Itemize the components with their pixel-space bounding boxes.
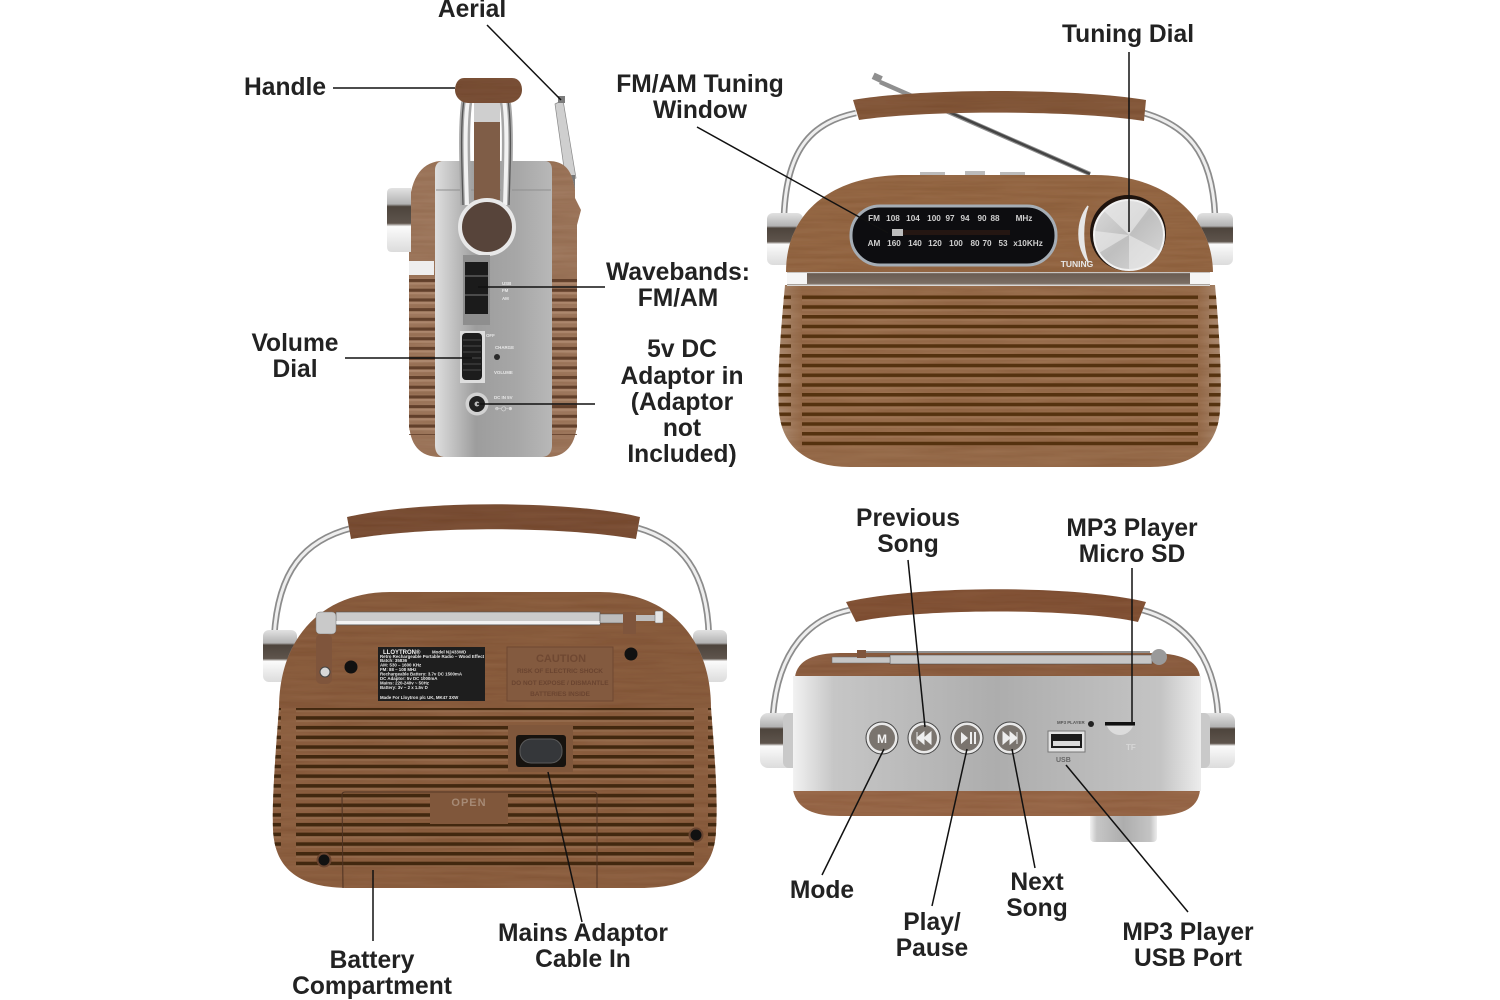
callout: micro sd: MP3 Player [1066,515,1198,542]
back handle [274,504,709,640]
side aerial [555,96,576,195]
callout: dc adaptor: Adaptor in [621,363,743,390]
callout: tuning window: FM/AM Tuning [616,71,784,98]
panel: side view radio [387,78,581,457]
top cabinet [793,653,1201,816]
side body [409,161,581,457]
side volume dial: VOLUME [494,370,513,375]
front cabinet [775,175,1225,467]
callout: usb port: MP3 Player [1122,919,1254,946]
callout: usb port: USB Port [1134,945,1242,972]
callout: mode: Mode [790,877,854,904]
callout: next song: Next [1010,869,1064,896]
callout: dc adaptor: Included) [627,441,737,468]
caution panel: RISK OF ELECTRIC SHOCK [517,668,603,675]
front aerial [872,73,1090,174]
callout: tuning window [616,71,888,233]
callout: battery compartment [292,870,452,1000]
callout: play pause: Pause [896,935,968,962]
callout: micro sd [1066,515,1198,724]
rating label: AM: 530 – 1600 KHz [380,662,422,668]
rating label: Mains: 220-240v ~ 50Hz [380,680,430,686]
rating label [378,647,485,701]
panel: front view radio [767,73,1233,467]
tuning window: 100 [949,239,963,248]
side dc jack: DC IN 5V [494,395,513,400]
rating label: FM: 88 – 108 MHz [380,667,417,672]
back cabinet [270,592,720,890]
top handle [773,589,1218,715]
side volume dial [460,331,514,383]
tuning window: FM [868,214,880,223]
tuning window: 94 [960,214,970,223]
callout: play pause: Play/ [903,909,961,936]
usb port [1048,720,1094,764]
callout: dc adaptor: 5v DC [647,336,717,363]
back side knobs [263,630,727,682]
caution panel [507,647,613,701]
tuning window: 140 [908,239,922,248]
micro sd slot [1105,722,1136,752]
battery compartment [342,792,597,888]
side dc jack: ⊖–◯–⊕ [495,406,512,412]
callout: volume dial: Volume [251,330,339,357]
callout: dc adaptor: (Adaptor [631,389,734,416]
tuning window: 97 [945,214,955,223]
callout: previous song [856,505,960,727]
next button [994,722,1026,754]
mode button [866,722,898,754]
mode button: M [877,732,887,746]
side volume dial: OFF [486,333,495,338]
callout: wavebands [478,259,750,312]
callout: play pause [896,749,968,962]
rating label: LLOYTRON® [383,649,421,656]
tuning window: 160 [887,239,901,248]
tuning window: 120 [928,239,942,248]
side waveband switch: FM [502,288,509,293]
back aerial [316,611,663,684]
callout: handle: Handle [244,74,326,101]
tuning dial: TUNING [1061,259,1094,269]
rating label: DC Adaptor: 5v DC 1000mA [380,676,438,681]
callout: volume dial: Dial [272,356,318,383]
rating label: Made For Lloytron plc UK, MK47 3XW [380,695,459,700]
callout: mode [790,749,884,904]
top bottom knob [1090,812,1157,842]
rating label: Battery: 3v – 2 x 1.5v D [380,685,428,690]
mains adaptor port [516,735,566,767]
caution panel: CAUTION [536,653,586,665]
back screws [318,828,702,866]
callout: mains adaptor: Cable In [535,946,631,973]
side dc jack [466,392,513,416]
top aerial [832,649,1167,665]
rating label: Rechargeable Battery: 3.7v DC 1500mA [380,672,463,676]
tuning window: MHz [1016,214,1032,223]
caution panel: BATTERIES INSIDE [530,691,591,698]
rating label: Model N2433WD [432,650,466,654]
callout: battery compartment: Battery [330,947,415,974]
rating label: Batch: 35836 [380,658,408,663]
top side knobs [760,713,1235,768]
callout: micro sd: Micro SD [1079,541,1185,568]
callout: wavebands: Wavebands: [606,259,750,286]
tuning dial [1061,195,1166,271]
callout: tuning window: Window [653,97,748,124]
callout: dc adaptor [477,336,743,468]
front side knobs [767,213,1233,265]
tuning window: 104 [906,214,920,223]
previous button [908,722,940,754]
callout: next song: Song [1006,895,1068,922]
play pause button [951,722,983,754]
tuning window: 53 [998,239,1008,248]
tuning window [851,206,1056,265]
usb port: MP3 PLAYER [1057,720,1085,725]
callout: wavebands: FM/AM [638,285,718,312]
callout: mains adaptor [498,772,668,973]
side volume dial: CHARGE [495,345,514,350]
callout: previous song: Previous [856,505,960,532]
tuning window: 80 [970,239,980,248]
side waveband switch [463,255,511,325]
top buttons [920,171,1025,175]
callout: battery compartment: Compartment [292,973,452,1000]
tuning window: AM [868,239,881,248]
tuning window: 108 [886,214,900,223]
side knob [387,188,411,252]
side waveband switch: AM [502,296,509,301]
panel: top view radio [760,589,1235,842]
tuning window: 88 [990,214,1000,223]
usb port: USB [1056,757,1071,764]
callout: usb port [1066,765,1254,972]
micro sd slot: TF [1126,743,1136,752]
caution panel: DO NOT EXPOSE / DISMANTLE [511,680,609,687]
side handle [455,78,522,254]
callout: mains adaptor: Mains Adaptor [498,920,668,947]
panel: back view radio [263,504,727,890]
tuning window: 90 [977,214,987,223]
tuning window: 100 [927,214,941,223]
rating label: Retro Rechargeable Portable Radio – Wood Effect [380,654,485,659]
tuning window: 70 [982,239,992,248]
callout: next song [1006,749,1068,922]
back holes [344,648,638,674]
callout: volume dial [251,330,472,383]
tuning window: x10KHz [1013,239,1043,248]
callout: aerial [438,0,561,100]
front handle [784,91,1215,215]
callout: dc adaptor: not [663,415,701,442]
battery compartment: OPEN [451,797,487,809]
side waveband switch: USB [502,281,511,286]
callout: previous song: Song [877,531,939,558]
callout: tuning dial: Tuning Dial [1062,21,1194,48]
